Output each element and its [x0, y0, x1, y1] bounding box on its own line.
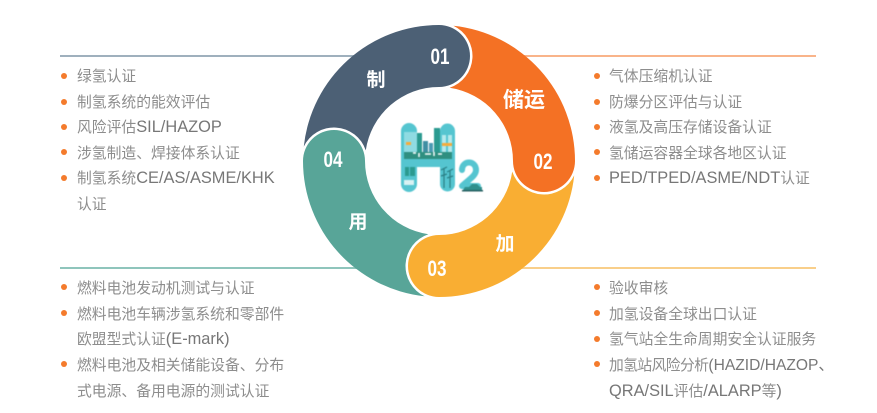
panel: storage and transport certification list: 气体压缩机认证: [609, 69, 713, 85]
panel: storage and transport certification list: PED/TPED/ASME/NDT认证: [609, 169, 810, 187]
panel: refuelling station certification list: QRA/SIL评估/ALARP等): [609, 382, 782, 400]
segment: refuelling (yellow): [408, 172, 574, 297]
icon: H2 city illustration: [401, 123, 483, 192]
panel: application certification list: 欧盟型式认证(E-mark): [77, 330, 230, 348]
label: 加: 加: [495, 233, 515, 255]
segment: application (teal): [303, 130, 428, 296]
segment: storage and transport (orange): [450, 26, 575, 192]
label: 01: 01: [430, 44, 450, 69]
panel: refuelling station certification list: [594, 280, 824, 400]
panel: application certification list: 燃料电池车辆涉氢系统和零部件: [77, 307, 284, 323]
label: 用: 用: [348, 212, 368, 233]
panel: production certification list: 绿氢认证: [77, 69, 136, 85]
panel: refuelling station certification list: 加氢设备全球出口认证: [609, 307, 757, 323]
panel: application certification list: 式电源、备用电源的测试认证: [77, 384, 269, 400]
panel: refuelling station certification list: 氢气站全生命周期安全认证服务: [609, 332, 816, 348]
panel: storage and transport certification list: [594, 68, 810, 187]
divider: top right: [520, 55, 816, 57]
panel: storage and transport certification list: 防爆分区评估与认证: [609, 95, 742, 111]
label: 储运: 储运: [503, 89, 545, 112]
divider: bottom right: [520, 267, 816, 269]
panel: storage and transport certification list: 液氢及高压存储设备认证: [609, 120, 772, 136]
panel: production certification list: 涉氢制造、焊接体系认证: [77, 146, 240, 162]
panel: refuelling station certification list: 验收审核: [609, 281, 668, 297]
panel: application certification list: 燃料电池发动机测试与认证: [77, 281, 255, 297]
label: 04: 04: [324, 147, 343, 172]
panel: production certification list: 制氢系统CE/AS/ASME/KHK: [77, 169, 275, 187]
panel: production certification list: 风险评估SIL/HAZOP: [77, 118, 222, 136]
panel: production certification list: [61, 68, 275, 213]
divider: bottom left: [60, 267, 360, 269]
panel: production certification list: 认证: [77, 197, 107, 213]
panel: production certification list: 制氢系统的能效评估: [77, 95, 210, 111]
divider: top left: [60, 55, 360, 57]
label: 制: 制: [366, 69, 386, 91]
panel: application certification list: [61, 280, 284, 400]
segment: production (dark slate): [304, 25, 470, 150]
panel: application certification list: 燃料电池及相关储能设备、分布: [77, 358, 284, 374]
panel: storage and transport certification list: 氢储运容器全球各地区认证: [609, 146, 787, 162]
label: 03: 03: [428, 256, 446, 281]
label: 02: 02: [534, 149, 552, 174]
